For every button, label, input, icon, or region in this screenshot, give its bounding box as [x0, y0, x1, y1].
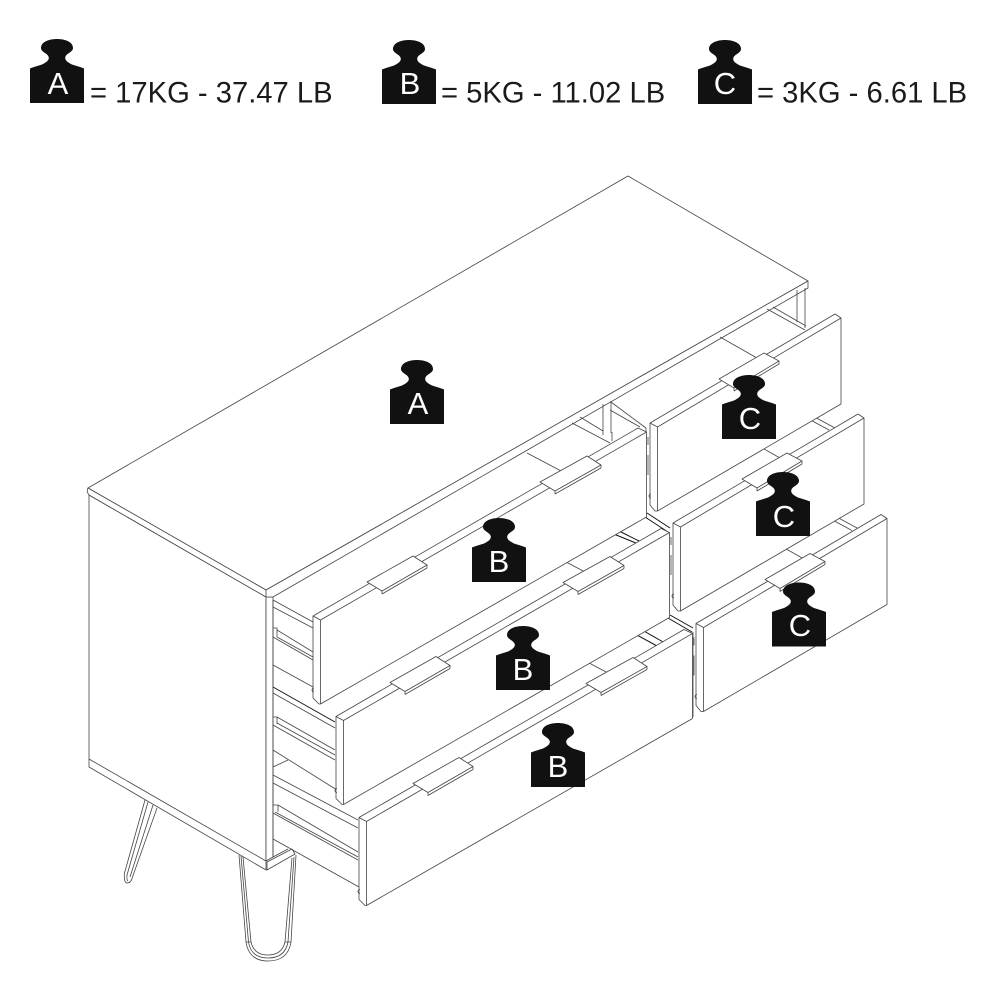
cabinet side panel: [89, 495, 266, 870]
chest of drawers line drawing: [87, 176, 887, 961]
legend: weight B: B: [400, 66, 420, 101]
drawer: top right: [648, 307, 841, 511]
hairpin leg: rear: [124, 800, 157, 883]
legend: weight C: C: [714, 66, 736, 101]
weight marker A on top: A: [408, 386, 429, 421]
drawer: top left: [312, 417, 646, 704]
cabinet interior posts: [603, 288, 805, 441]
weight marker B: bottom left drawer: B: [548, 749, 568, 784]
interior cross pieces behind right drawers: [645, 428, 693, 717]
cabinet front post and base: [266, 597, 295, 870]
weight marker C: bottom right drawer: C: [789, 608, 811, 643]
legend: weight B: [382, 40, 665, 110]
legend: weight A: [30, 39, 333, 110]
drawer: bottom right: [694, 508, 887, 712]
legend: weight C: [698, 40, 967, 110]
weight marker C: middle right drawer: [756, 472, 810, 536]
legend: weight A: A: [48, 66, 69, 101]
legend: weight B: = 5KG - 11.02 LB: [441, 78, 665, 110]
weight marker C: top right drawer: [722, 375, 776, 439]
weight marker A on top: [390, 360, 444, 424]
hairpin leg: front: [239, 855, 296, 961]
drawer: middle right: [671, 407, 864, 611]
legend: weight C: = 3KG - 6.61 LB: [757, 78, 967, 110]
drawer: middle left: [335, 528, 670, 804]
weight marker C: top right drawer: C: [739, 401, 761, 436]
weight marker C: bottom right drawer: [772, 582, 826, 646]
legend: weight A: = 17KG - 37.47 LB: [90, 78, 333, 110]
weight marker B: bottom left drawer: [531, 723, 585, 787]
weight marker B: middle left drawer: [496, 626, 550, 690]
drawer: bottom left: [358, 630, 692, 906]
weight marker C: middle right drawer: C: [773, 499, 795, 534]
left drawer side rails: [273, 600, 359, 887]
weight marker B: top left drawer: [472, 518, 526, 582]
cabinet top: [87, 176, 808, 597]
weight marker B: middle left drawer: B: [513, 652, 533, 687]
weight marker B: top left drawer: B: [489, 544, 509, 579]
